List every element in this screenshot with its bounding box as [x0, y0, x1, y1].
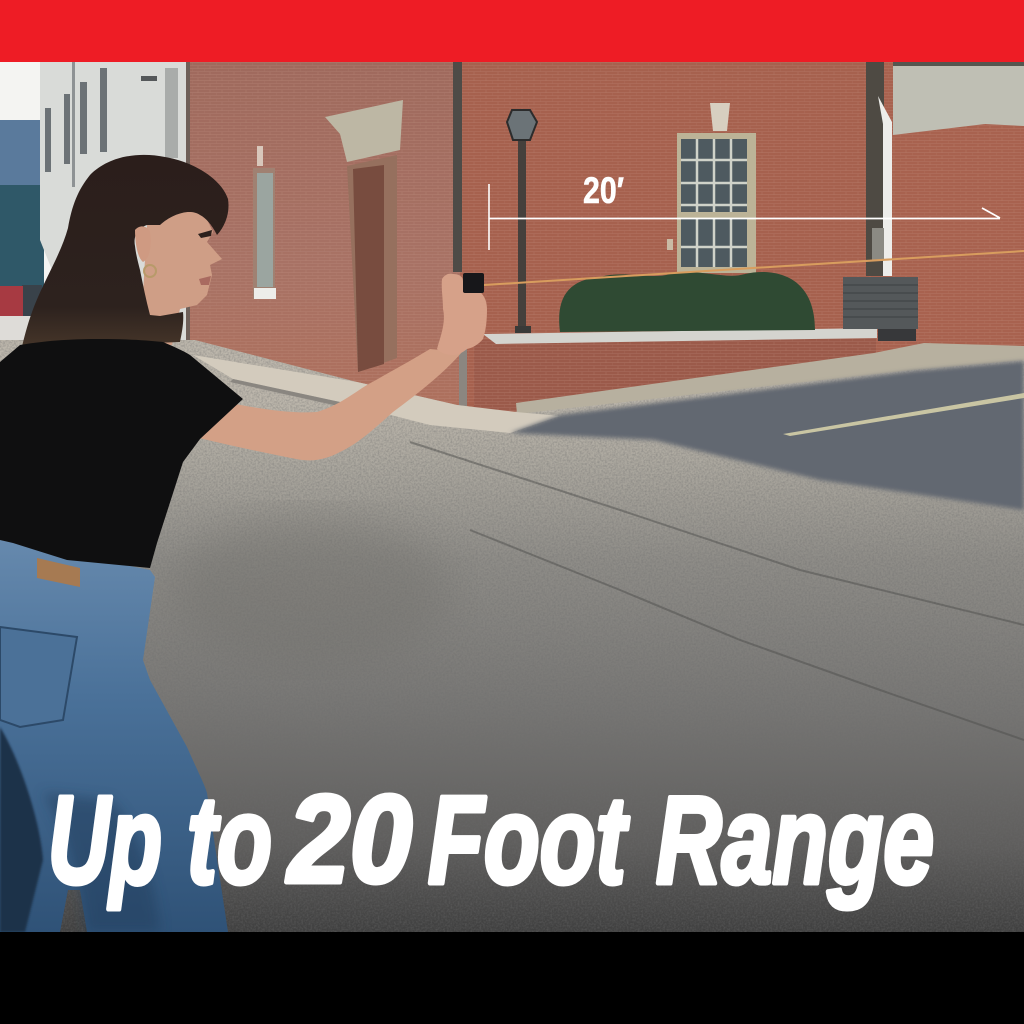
brick building	[190, 62, 1024, 412]
lips	[199, 276, 211, 285]
downpipe	[453, 62, 462, 272]
road surface	[0, 340, 1024, 932]
headline: to	[187, 772, 272, 910]
hand	[437, 274, 487, 355]
headline: Up	[48, 772, 162, 910]
stone lintel over door	[325, 100, 403, 162]
neck and face	[140, 205, 222, 345]
road texture	[0, 340, 1024, 932]
eye	[198, 230, 212, 238]
right side trim and pipes	[893, 62, 1024, 135]
headline: Foot	[428, 772, 629, 910]
earring	[144, 265, 156, 277]
parking line	[783, 393, 1024, 436]
dark rear leg	[0, 727, 43, 932]
belt patch	[37, 558, 80, 587]
spray stream	[484, 251, 1024, 285]
jeans front shadow	[43, 793, 160, 932]
road cracks	[410, 442, 1024, 740]
back pocket	[0, 627, 77, 727]
woman figure	[0, 155, 487, 932]
lamp post	[507, 110, 537, 333]
doorway	[347, 155, 397, 372]
spray canister	[463, 273, 484, 293]
bottom black band	[0, 932, 1024, 1024]
distance label: 20′	[583, 170, 624, 211]
planter with hedge	[474, 272, 877, 411]
dark road patch	[170, 515, 450, 665]
distance arrow: 20 feet	[489, 170, 1000, 250]
background: sky and distant buildings	[0, 62, 200, 372]
air conditioning unit	[843, 277, 918, 341]
white pilaster trace	[257, 146, 263, 166]
headline: 20	[286, 771, 412, 909]
shaded parking area	[510, 361, 1024, 510]
black t-shirt	[0, 339, 243, 568]
top red banner	[0, 0, 1024, 62]
hair	[18, 155, 229, 372]
headline: Range	[656, 772, 934, 910]
upper arm and forearm	[195, 349, 462, 460]
large window	[677, 133, 756, 273]
ear	[135, 226, 151, 262]
keystone	[710, 103, 730, 131]
side window	[253, 168, 276, 299]
curb and sidewalk	[193, 343, 1024, 433]
wall bracket	[667, 239, 673, 250]
jeans	[0, 540, 228, 932]
headline	[48, 771, 934, 910]
